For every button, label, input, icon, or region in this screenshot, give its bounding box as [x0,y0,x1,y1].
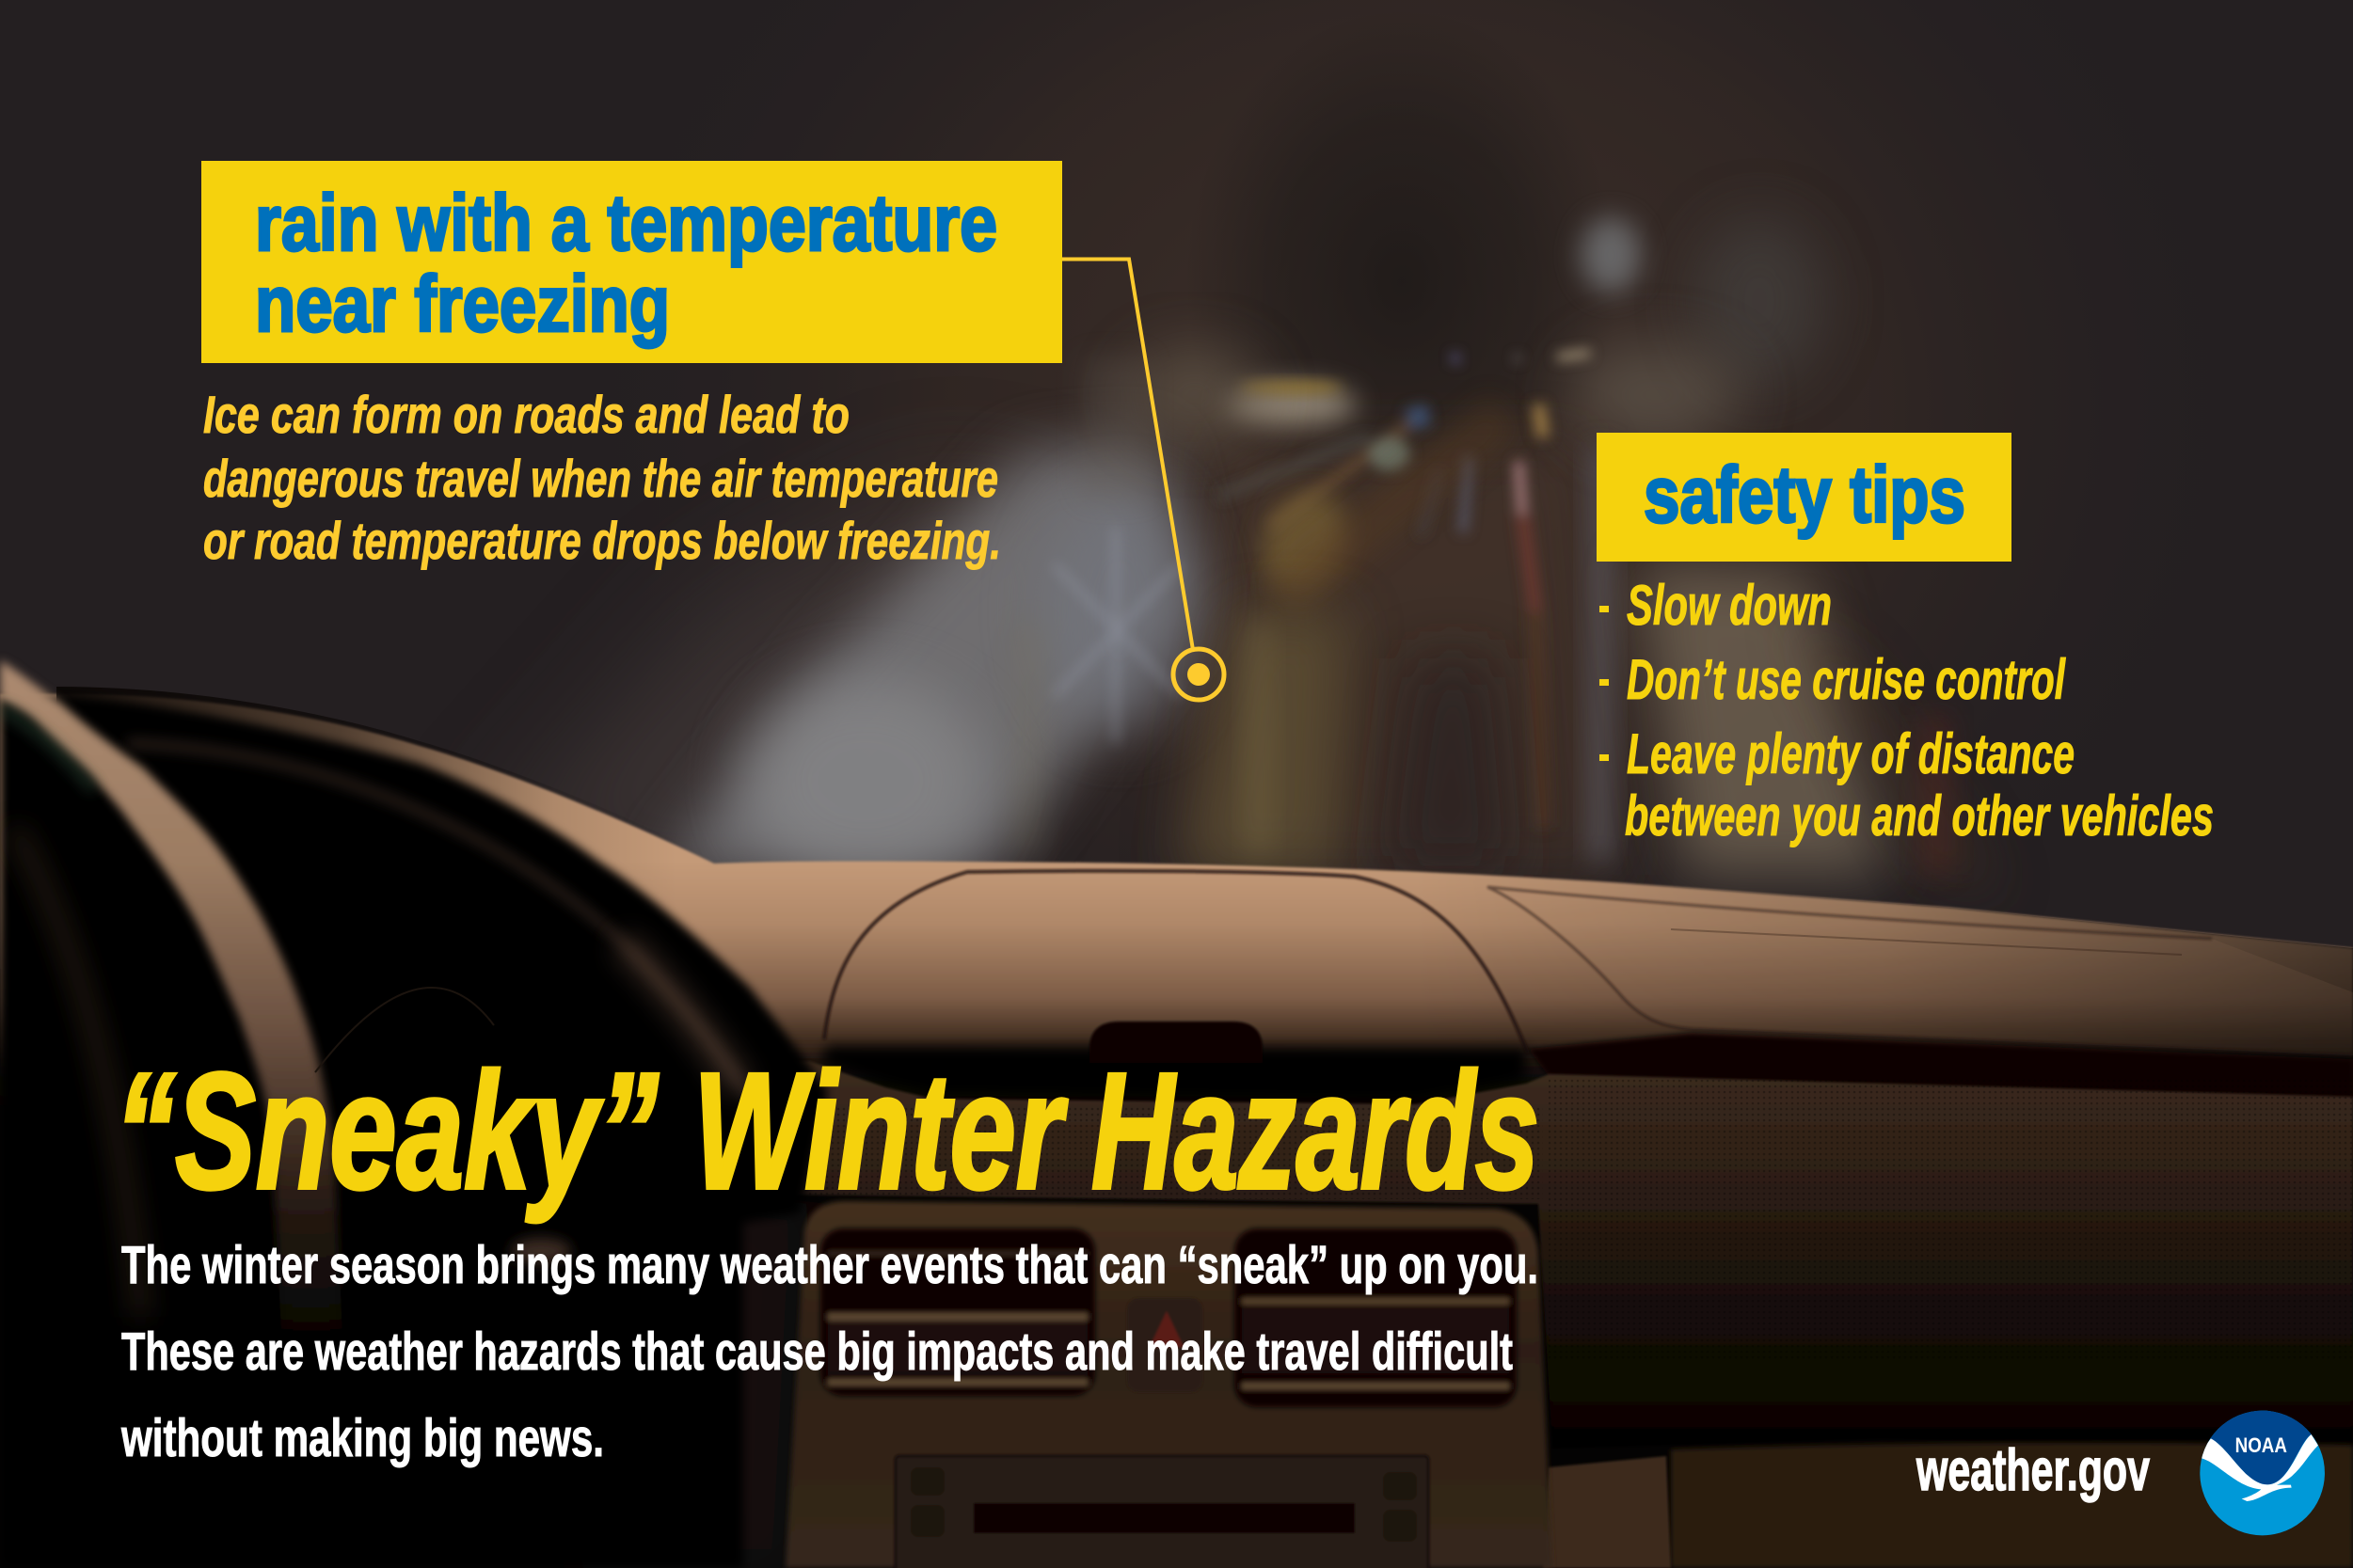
safety tips list: Slow down [1627,574,1832,637]
title: Winter [693,1039,1068,1224]
icon: NOAA logo: NOAA [2235,1433,2287,1457]
car dashboard and interior [0,660,2353,1568]
callout description text: or road temperature drops below freezing. [203,511,1001,570]
safety tips heading box: safety tips [1644,451,1965,539]
lower right glove surface [1671,1443,2353,1568]
radio panel [896,1456,1428,1568]
left air vent [820,1228,1095,1396]
title: “Sneaky” [115,1039,659,1224]
instrument hood black shape [0,694,828,1568]
callout: rain heading box [201,161,1062,363]
dash lower lip shadow [1528,1033,2353,1099]
right dashboard pad [1487,887,2353,1055]
website url: weather.gov [1916,1438,2150,1503]
connector line with target marker [1062,260,1224,700]
lit hood arc over gauges [621,941,743,1091]
title [115,1039,1539,1224]
title: Hazards [1091,1039,1539,1224]
trim beside console [1543,1456,1671,1568]
hazard button [1127,1298,1202,1392]
interior base [0,969,2353,1568]
textured instrument panel [771,1061,2353,1449]
left lower interior [489,1166,809,1568]
right air vent [1234,1228,1517,1407]
intro paragraph: These are weather hazards that cause big impacts and make travel difficult [121,1322,1513,1382]
headlight and tail-light streaks [1218,353,1590,828]
right shade on dashboard [1411,870,2353,1105]
callout description text [203,385,1001,570]
black recess under glove panel [819,1046,1528,1102]
dashboard top surface including hood [0,694,2353,1105]
callout description text: Ice can form on roads and lead to [203,385,850,444]
intro paragraph [120,1235,1538,1468]
steering wheel inner shadow edge [14,828,141,1317]
safety tips heading box [1597,433,2011,562]
hood lit band edge [127,743,753,1101]
callout: rain heading box: near freezing [255,260,670,348]
intro paragraph: without making big news. [120,1408,604,1468]
blurred road scene through windshield [470,0,2353,969]
callout: rain heading box: rain with a temperature [255,179,997,267]
callout description text: dangerous travel when the air temperature [203,449,998,508]
left shade on hood [56,687,677,1035]
steering wheel rim [0,660,343,1354]
stalk knob [511,1238,571,1264]
speedometer dial [315,988,494,1072]
icon: NOAA logo [2200,1411,2325,1535]
steering wheel green reflection [0,707,94,790]
glove panel handle [1089,1022,1263,1063]
centre console [786,1201,1552,1568]
glove box panel [824,871,1528,1053]
safety tips list [1599,574,2214,847]
safety tips list: Don’t use cruise control [1627,648,2066,711]
safety tips list: Leave plenty of distance [1627,722,2075,785]
intro paragraph: The winter season brings many weather events that can “sneak” up on you. [121,1235,1538,1295]
